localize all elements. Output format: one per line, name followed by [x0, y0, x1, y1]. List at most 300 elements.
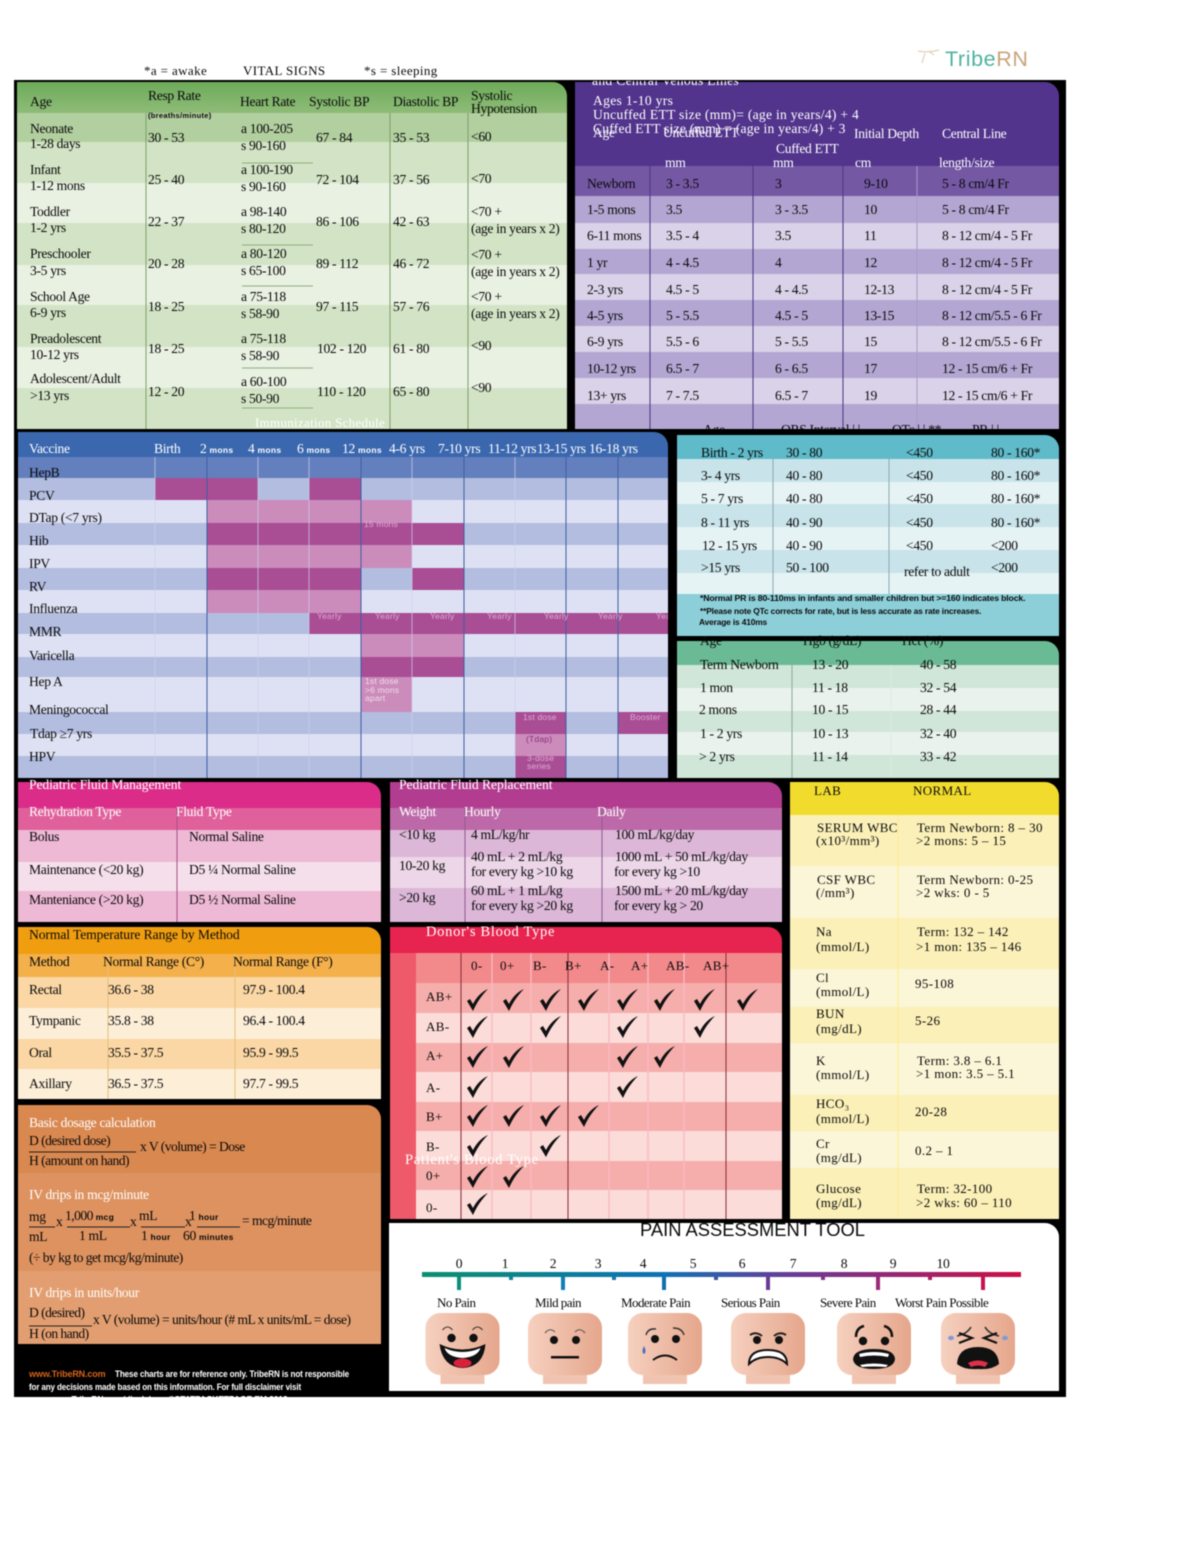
- lab normal ranges: [915, 820, 1043, 1210]
- ETT rows: 4.5 - 5: [775, 308, 808, 323]
- temperature rows: 96.4 - 100.4: [243, 1013, 305, 1028]
- temperature rows: 36.5 - 37.5: [108, 1076, 164, 1091]
- donor type labels: A+: [631, 958, 648, 973]
- cell notes: Yearly: [375, 611, 400, 621]
- patient type labels: A-: [426, 1080, 440, 1095]
- vaccine names: HepB: [29, 465, 60, 480]
- age column: Infant: [30, 162, 61, 177]
- lab names: Na: [816, 924, 832, 939]
- fluid management rows: Fluid Type: [176, 804, 232, 819]
- hgb rows: 11 - 18: [812, 680, 848, 695]
- systolic hypotension column: <90: [471, 338, 492, 353]
- cell notes: 1st dose: [523, 712, 557, 722]
- systolic hypotension column: <60: [471, 129, 492, 144]
- lab names: (mg/dL): [816, 1021, 862, 1036]
- heart rate column: a 60-100: [241, 374, 287, 389]
- lab names: [816, 820, 898, 1210]
- IV drips mcg per minute formula: x: [56, 1214, 63, 1229]
- donor type labels: B+: [565, 958, 582, 973]
- lab normal ranges: Term: 3.8 – 6.1: [917, 1053, 1002, 1068]
- age column: 6-9 yrs: [30, 305, 66, 320]
- lab normal ranges: Term: 32-100: [917, 1181, 992, 1196]
- ETT rows: 8 - 12 cm/4 - 5 Fr: [942, 255, 1033, 270]
- IV drips mcg per minute formula: 1 hour: [141, 1228, 171, 1243]
- panel: normal temperature range: [18, 927, 381, 1099]
- pain scale numbers: [456, 1256, 950, 1271]
- lab names: Glucose: [816, 1181, 861, 1196]
- systolic hypotension column: [471, 129, 559, 395]
- heart rate column: a 80-120: [241, 246, 287, 261]
- vaccine names: Meningococcal: [29, 702, 109, 717]
- temperature rows: 97.7 - 99.5: [243, 1076, 299, 1091]
- ETT formula text: Ages 1-10 yrs: [593, 93, 673, 108]
- ETT rows: 17: [864, 361, 877, 376]
- ETT rows: 5 - 8 cm/4 Fr: [942, 202, 1009, 217]
- footer disclaimer: for any decisions made based on this information. For full disclaimer visit: [29, 1382, 301, 1392]
- fluid replacement rows: Daily: [597, 804, 626, 819]
- immunization header row: 11-12 yrs: [488, 441, 536, 456]
- cell notes: 3-dose: [527, 753, 554, 763]
- systolic hypotension column: (age in years x 2): [471, 264, 559, 280]
- ETT rows: 3: [775, 176, 782, 191]
- pain scale numbers: 2: [550, 1256, 557, 1271]
- heart rate column: a 98-140: [241, 204, 287, 219]
- hgb rows: Term Newborn: [700, 657, 779, 672]
- ECG rows: [701, 445, 1041, 579]
- ETT rows: 6-9 yrs: [587, 334, 623, 349]
- lab names: (mmol/L): [816, 1067, 870, 1082]
- hgb rows: Hct (%): [902, 633, 943, 649]
- lab heading: LAB: [814, 783, 841, 798]
- panel: pediatric fluid management: [18, 777, 381, 922]
- heart rate column: s 80-120: [241, 221, 286, 236]
- IV drips mcg per minute formula: x: [185, 1214, 192, 1229]
- pain level labels: Serious Pain: [721, 1295, 781, 1310]
- icon: worst pain face: [941, 1313, 1015, 1384]
- ETT rows: 3 - 3.5: [775, 202, 808, 217]
- lab normal ranges: 95-108: [915, 976, 954, 991]
- ETT rows: 4-5 yrs: [587, 308, 623, 323]
- fluid replacement rows: for every kg > 20: [614, 898, 703, 913]
- vaccine names: Influenza: [29, 601, 78, 616]
- vaccine names: Varicella: [29, 648, 75, 663]
- ECG rows: <450: [906, 491, 933, 506]
- ETT rows: 12 - 15 cm/6 + Fr: [942, 388, 1033, 403]
- temperature rows: Normal Range (C°): [103, 954, 204, 970]
- IV drips mcg per minute formula: = mcg/minute: [242, 1213, 312, 1228]
- respiratory rate column: 12 - 20: [148, 384, 185, 399]
- ETT rows: 8 - 12 cm/4 - 5 Fr: [942, 228, 1033, 243]
- systolic hypotension column: <70 +: [471, 247, 502, 262]
- vaccine names: Tdap ≥7 yrs: [30, 726, 92, 741]
- clipped ECG header text: QRS Interval | |: [781, 422, 860, 437]
- hgb rows: 11 - 14: [812, 749, 848, 764]
- clipped ECG header text: PR | |: [972, 422, 999, 437]
- systolic BP column: 110 - 120: [317, 384, 366, 399]
- pain tool heading: PAIN ASSESSMENT TOOL: [640, 1219, 865, 1240]
- temperature rows: Oral: [29, 1045, 52, 1060]
- fluid replacement rows: <10 kg: [399, 827, 436, 842]
- ETT rows: 1-5 mons: [587, 202, 635, 217]
- diastolic BP column: 46 - 72: [393, 256, 430, 271]
- page title row: vital signs: [144, 63, 438, 78]
- ETT rows: 4 - 4.5: [666, 255, 699, 270]
- systolic BP column: 102 - 120: [317, 341, 367, 356]
- pain scale numbers: 9: [890, 1256, 897, 1271]
- ETT rows: 5 - 8 cm/4 Fr: [942, 176, 1009, 191]
- lab normal ranges: >1 mon: 3.5 – 5.1: [916, 1066, 1015, 1081]
- fluid replacement rows: 60 mL + 1 mL/kg: [471, 883, 563, 898]
- cell notes: 15 mons: [364, 519, 398, 529]
- donor type labels: 0-: [471, 958, 483, 973]
- panel: blood type compatibility: [390, 924, 782, 1219]
- diastolic BP column: 42 - 63: [393, 214, 430, 229]
- temperature rows: 97.9 - 100.4: [243, 982, 305, 997]
- footer disclaimer: These charts are for reference only. TribeRN is not responsible: [115, 1369, 349, 1379]
- basic dosage formula: [29, 1115, 245, 1169]
- immunization heading overflow: Immunization Schedule: [255, 415, 385, 430]
- vital signs header row: Resp Rate: [148, 88, 201, 103]
- panel: hemoglobin and hematocrit: [677, 633, 1059, 778]
- fluid replacement rows: 100 mL/kg/day: [615, 827, 695, 842]
- lab names: (mg/dL): [816, 1150, 862, 1165]
- fluid replacement rows: 4 mL/kg/hr: [471, 827, 530, 842]
- cell notes: >6 mons: [365, 685, 399, 695]
- IV drips mcg per minute formula: mL: [29, 1229, 47, 1244]
- page title row: vital signs: *s = sleeping: [364, 63, 438, 78]
- temperature rows: 35.8 - 38: [108, 1013, 154, 1028]
- temperature rows: Rectal: [29, 982, 62, 997]
- heart rate column: s 50-90: [241, 391, 280, 406]
- ETT header row: Central Line: [942, 126, 1007, 141]
- cell notes: Yearly: [598, 611, 623, 621]
- systolic hypotension column: <70: [471, 171, 492, 186]
- systolic BP column: [316, 130, 367, 399]
- patient type labels: AB+: [426, 989, 453, 1004]
- ETT header row: Uncuffed ETT: [663, 125, 739, 140]
- age column: Preadolescent: [30, 331, 102, 346]
- ETT rows: 9-10: [864, 176, 888, 191]
- ETT rows: [587, 176, 1042, 403]
- diastolic BP column: 57 - 76: [393, 299, 430, 314]
- fluid replacement rows: 10-20 kg: [399, 858, 446, 873]
- lab names: (mmol/L): [816, 984, 870, 999]
- fluid replacement rows: 40 mL + 2 mL/kg: [471, 849, 563, 864]
- cell notes: [317, 519, 681, 771]
- basic dosage formula: Basic dosage calculation: [29, 1115, 156, 1130]
- icon: mild pain face: [528, 1313, 602, 1384]
- vaccine names: HPV: [29, 749, 56, 764]
- ETT rows: 3.5 - 4: [666, 228, 699, 243]
- age column: Adolescent/Adult: [30, 371, 121, 386]
- fluid replacement rows: [399, 804, 748, 913]
- panel: pain assessment tool: [389, 1219, 1059, 1391]
- IV drips units per hour formula: x V (volume) = units/hour (# mL x units/mL = dose): [93, 1312, 350, 1328]
- pain level labels: No Pain: [437, 1295, 476, 1310]
- patient type labels: 0+: [426, 1168, 441, 1183]
- clipped ECG header text: Age: [703, 422, 725, 437]
- cell notes: 1st dose: [365, 676, 399, 686]
- patient type labels: A+: [426, 1048, 443, 1063]
- ECG footnotes: Average is 410ms: [699, 617, 768, 627]
- page title row: vital signs: *a = awake: [144, 63, 207, 78]
- ECG rows: 8 - 11 yrs: [701, 515, 749, 530]
- ETT rows: 10-12 yrs: [587, 361, 636, 376]
- icon: moderate pain face: [628, 1313, 702, 1384]
- cell notes: apart: [365, 693, 386, 703]
- lab normal ranges: Term Newborn: 8 – 30: [917, 820, 1043, 835]
- panel: vital signs table: [17, 82, 567, 430]
- temperature heading: Normal Temperature Range by Method: [29, 927, 240, 942]
- age column: Neonate: [30, 121, 73, 136]
- systolic hypotension column: <70 +: [471, 289, 502, 304]
- immunization header row: 13-15 yrs: [537, 441, 586, 456]
- lab names: (mmol/L): [816, 1111, 870, 1126]
- vaccine names: RV: [29, 579, 47, 594]
- patient type labels: B+: [426, 1109, 443, 1124]
- age column: 10-12 yrs: [30, 347, 79, 362]
- panel: immunization schedule: [18, 432, 681, 778]
- heart rate column: s 58-90: [241, 306, 280, 321]
- ECG rows: <450: [906, 538, 933, 553]
- pain level labels: Worst Pain Possible: [895, 1295, 989, 1310]
- lab names: Cl: [816, 970, 829, 985]
- ETT header row: [593, 125, 1007, 170]
- ECG rows: >15 yrs: [701, 560, 740, 575]
- heart rate column: s 58-90: [241, 348, 280, 363]
- donor type labels: AB+: [703, 958, 730, 973]
- vaccine names: [29, 465, 109, 764]
- icon: severe pain face: [837, 1313, 911, 1384]
- fluid management rows: D5 ½ Normal Saline: [189, 892, 296, 907]
- lab normal ranges: >1 mon: 135 – 146: [916, 939, 1022, 954]
- patient type labels: [426, 989, 453, 1215]
- lab names: BUN: [816, 1006, 845, 1021]
- ETT rows: 11: [864, 228, 876, 243]
- hgb rows: 28 - 44: [920, 702, 957, 717]
- pain scale numbers: 3: [595, 1256, 602, 1271]
- age column: School Age: [30, 289, 90, 304]
- ECG rows: 30 - 80: [786, 445, 823, 460]
- systolic BP column: 97 - 115: [316, 299, 359, 314]
- heart rate column: a 100-190: [241, 162, 293, 177]
- ETT rows: 19: [864, 388, 877, 403]
- fluid replacement rows: for every kg >10 kg: [471, 864, 573, 879]
- age column: [30, 121, 121, 403]
- ECG footnotes: **Please note QTc corrects for rate, but is less accurate as rate increases.: [700, 606, 981, 616]
- fluid management rows: [29, 804, 296, 908]
- cell notes: Yearly: [317, 611, 342, 621]
- systolic BP column: 89 - 112: [316, 256, 359, 271]
- hgb rows: 32 - 40: [920, 726, 957, 741]
- lab names: (mg/dL): [816, 1195, 862, 1210]
- ETT rows: 8 - 12 cm/5.5 - 6 Fr: [942, 334, 1042, 349]
- heart rate column: a 75-118: [241, 331, 286, 346]
- ETT rows: 6.5 - 7: [666, 361, 699, 376]
- ETT rows: 3.5: [775, 228, 792, 243]
- ECG rows: <200: [991, 538, 1018, 553]
- vaccine names: DTap (<7 yrs): [29, 510, 102, 526]
- systolic hypotension column: (age in years x 2): [471, 306, 559, 322]
- ETT rows: 6.5 - 7: [775, 388, 808, 403]
- ECG rows: <200: [991, 560, 1018, 575]
- IV drips mcg per minute formula: mg: [29, 1209, 46, 1224]
- IV drips mcg per minute formula: mL: [139, 1208, 157, 1223]
- immunization header row: 12 mons: [342, 441, 382, 456]
- immunization header row: 2 mons: [200, 441, 233, 456]
- IV drips mcg per minute formula: (÷ by kg to get mcg/kg/minute): [29, 1250, 183, 1266]
- ETT rows: 8 - 12 cm/4 - 5 Fr: [942, 282, 1033, 297]
- ECG rows: 5 - 7 yrs: [701, 491, 743, 506]
- cell notes: Booster: [630, 712, 661, 722]
- immunization header row: 16-18 yrs: [589, 441, 638, 456]
- systolic hypotension column: <70 +: [471, 204, 502, 219]
- IV drips mcg per minute formula: IV drips in mcg/minute: [29, 1187, 149, 1202]
- ETT rows: 8 - 12 cm/5.5 - 6 Fr: [942, 308, 1042, 323]
- ETT rows: 3 - 3.5: [666, 176, 699, 191]
- fluid management rows: Maintenance (<20 kg): [29, 862, 143, 878]
- temperature rows: 95.9 - 99.5: [243, 1045, 299, 1060]
- panel: dosage calculations: [18, 1105, 381, 1344]
- fluid replacement rows: for every kg >20 kg: [471, 898, 573, 913]
- diastolic BP column: 37 - 56: [393, 172, 430, 187]
- lab normal ranges: 0.2 – 1: [915, 1143, 953, 1158]
- hgb rows: 32 - 54: [920, 680, 957, 695]
- ECG rows: <450: [906, 515, 933, 530]
- systolic hypotension column: (age in years x 2): [471, 221, 559, 237]
- cell notes: series: [527, 761, 551, 771]
- temperature rows: Axillary: [29, 1076, 72, 1091]
- ETT rows: 6 - 6.5: [775, 361, 808, 376]
- lab names: (/mm³): [816, 885, 855, 900]
- cell notes: Yearly: [656, 611, 681, 621]
- donor heading: Donor's Blood Type: [426, 924, 555, 940]
- age column: 1-28 days: [30, 136, 80, 151]
- ETT header row: mm: [665, 155, 686, 170]
- hgb rows: 10 - 13: [812, 726, 849, 741]
- ECG rows: 40 - 90: [786, 515, 823, 530]
- pain scale numbers: 7: [790, 1256, 797, 1271]
- vaccine names: IPV: [29, 556, 50, 571]
- vital signs header row: Hypotension: [471, 101, 537, 116]
- systolic BP column: 72 - 104: [316, 172, 359, 187]
- immunization header row: 7-10 yrs: [438, 441, 480, 456]
- ETT formula text: Uncuffed ETT size (mm)= (age in years/4) + 4: [593, 107, 859, 123]
- pain scale numbers: 1: [502, 1256, 508, 1271]
- basic dosage formula: D (desired dose): [29, 1133, 110, 1149]
- heart rate column: s 65-100: [241, 263, 286, 278]
- respiratory rate column: 18 - 25: [148, 299, 185, 314]
- temperature rows: Method: [29, 954, 70, 969]
- ECG rows: refer to adult: [904, 564, 970, 579]
- IV drips mcg per minute formula: [29, 1187, 312, 1266]
- donor type labels: [471, 958, 730, 973]
- fluid replacement rows: Weight: [399, 804, 436, 819]
- vital signs header row: Systolic BP: [309, 94, 370, 109]
- IV drips mcg per minute formula: 1 hour: [189, 1208, 219, 1223]
- ECG rows: 40 - 90: [786, 538, 823, 553]
- cell notes: (Tdap): [526, 734, 552, 744]
- pain scale numbers: 8: [841, 1256, 848, 1271]
- ETT rows: 12-13: [864, 282, 895, 297]
- lab normal ranges: >2 mons: 5 – 15: [916, 833, 1006, 848]
- respiratory rate column: 18 - 25: [148, 341, 185, 356]
- pain level labels: [437, 1295, 989, 1310]
- patient type labels: AB-: [426, 1019, 450, 1034]
- fluid management rows: Normal Saline: [189, 829, 264, 844]
- ECG rows: 40 - 80: [786, 491, 823, 506]
- hgb rows: Age: [700, 633, 722, 648]
- ETT rows: 4 - 4.5: [775, 282, 808, 297]
- fluid replacement heading: Pediatric Fluid Replacement: [399, 777, 553, 792]
- hgb rows: [699, 633, 957, 764]
- ETT header row: Initial Depth: [854, 126, 919, 141]
- respiratory rate column: 25 - 40: [148, 172, 185, 187]
- ECG rows: Birth - 2 yrs: [701, 445, 763, 460]
- ETT rows: 6-11 mons: [587, 228, 641, 243]
- ECG rows: 80 - 160*: [991, 445, 1041, 460]
- vital signs header row: Systolic: [471, 88, 512, 103]
- immunization header row: 4-6 yrs: [389, 441, 425, 456]
- ETT rows: 13-15: [864, 308, 895, 323]
- pain scale numbers: 6: [739, 1256, 746, 1271]
- respiratory rate column: [148, 130, 185, 399]
- IV drips units per hour formula: [29, 1285, 350, 1342]
- icon: serious pain face: [731, 1313, 805, 1384]
- heart rate column: a 100-205: [241, 121, 293, 136]
- ECG rows: <450: [906, 445, 933, 460]
- ECG rows: 3- 4 yrs: [701, 468, 740, 483]
- ETT rows: 15: [864, 334, 877, 349]
- pain scale numbers: 5: [690, 1256, 697, 1271]
- lab heading: NORMAL: [913, 783, 972, 798]
- lab names: Cr: [816, 1136, 830, 1151]
- lab normal ranges: >2 wks: 0 - 5: [916, 885, 990, 900]
- temperature rows: 36.6 - 38: [108, 982, 154, 997]
- vital signs header row: Heart Rate: [240, 94, 295, 109]
- pain scale gradient bar: [422, 1272, 1021, 1290]
- pain scale numbers: 0: [456, 1256, 463, 1271]
- pain level labels: Severe Pain: [820, 1295, 877, 1310]
- hgb rows: 2 mons: [699, 702, 737, 717]
- ETT rows: 1 yr: [587, 255, 608, 270]
- pain scale numbers: 4: [640, 1256, 647, 1271]
- vital signs header row: [30, 88, 537, 120]
- hgb rows: 40 - 58: [920, 657, 957, 672]
- vaccine names: Hep A: [29, 674, 63, 689]
- age column: 1-2 yrs: [30, 220, 66, 235]
- cell notes: Yearly: [430, 611, 455, 621]
- ECG rows: 80 - 160*: [991, 491, 1041, 506]
- ETT header row: mm: [773, 155, 794, 170]
- fluid replacement rows: 1000 mL + 50 mL/kg/day: [615, 849, 748, 864]
- footer disclaimer: www.TribeRN.com/disclaimer ©STATPACKETPAGE EM 2019: [49, 1394, 288, 1404]
- fluid management heading: Pediatric Fluid Management: [29, 777, 182, 792]
- diastolic BP column: 35 - 53: [393, 130, 430, 145]
- footer disclaimer: www.TribeRN.com: [28, 1369, 106, 1379]
- respiratory rate column: 22 - 37: [148, 214, 185, 229]
- vital signs header row: Diastolic BP: [393, 94, 459, 109]
- IV drips mcg per minute formula: 1,000 mcg: [65, 1208, 114, 1223]
- fluid management rows: D5 ¼ Normal Saline: [189, 862, 296, 877]
- hgb rows: Hgb (g/dL): [803, 633, 861, 649]
- vaccine names: MMR: [29, 624, 63, 639]
- temperature rows: Tympanic: [29, 1013, 81, 1028]
- clipped ECG header text: QTc | | **: [892, 422, 942, 437]
- ETT header row: cm: [855, 155, 872, 170]
- lab normal ranges: 20-28: [915, 1104, 947, 1119]
- IV drips units per hour formula: IV drips in units/hour: [29, 1285, 140, 1300]
